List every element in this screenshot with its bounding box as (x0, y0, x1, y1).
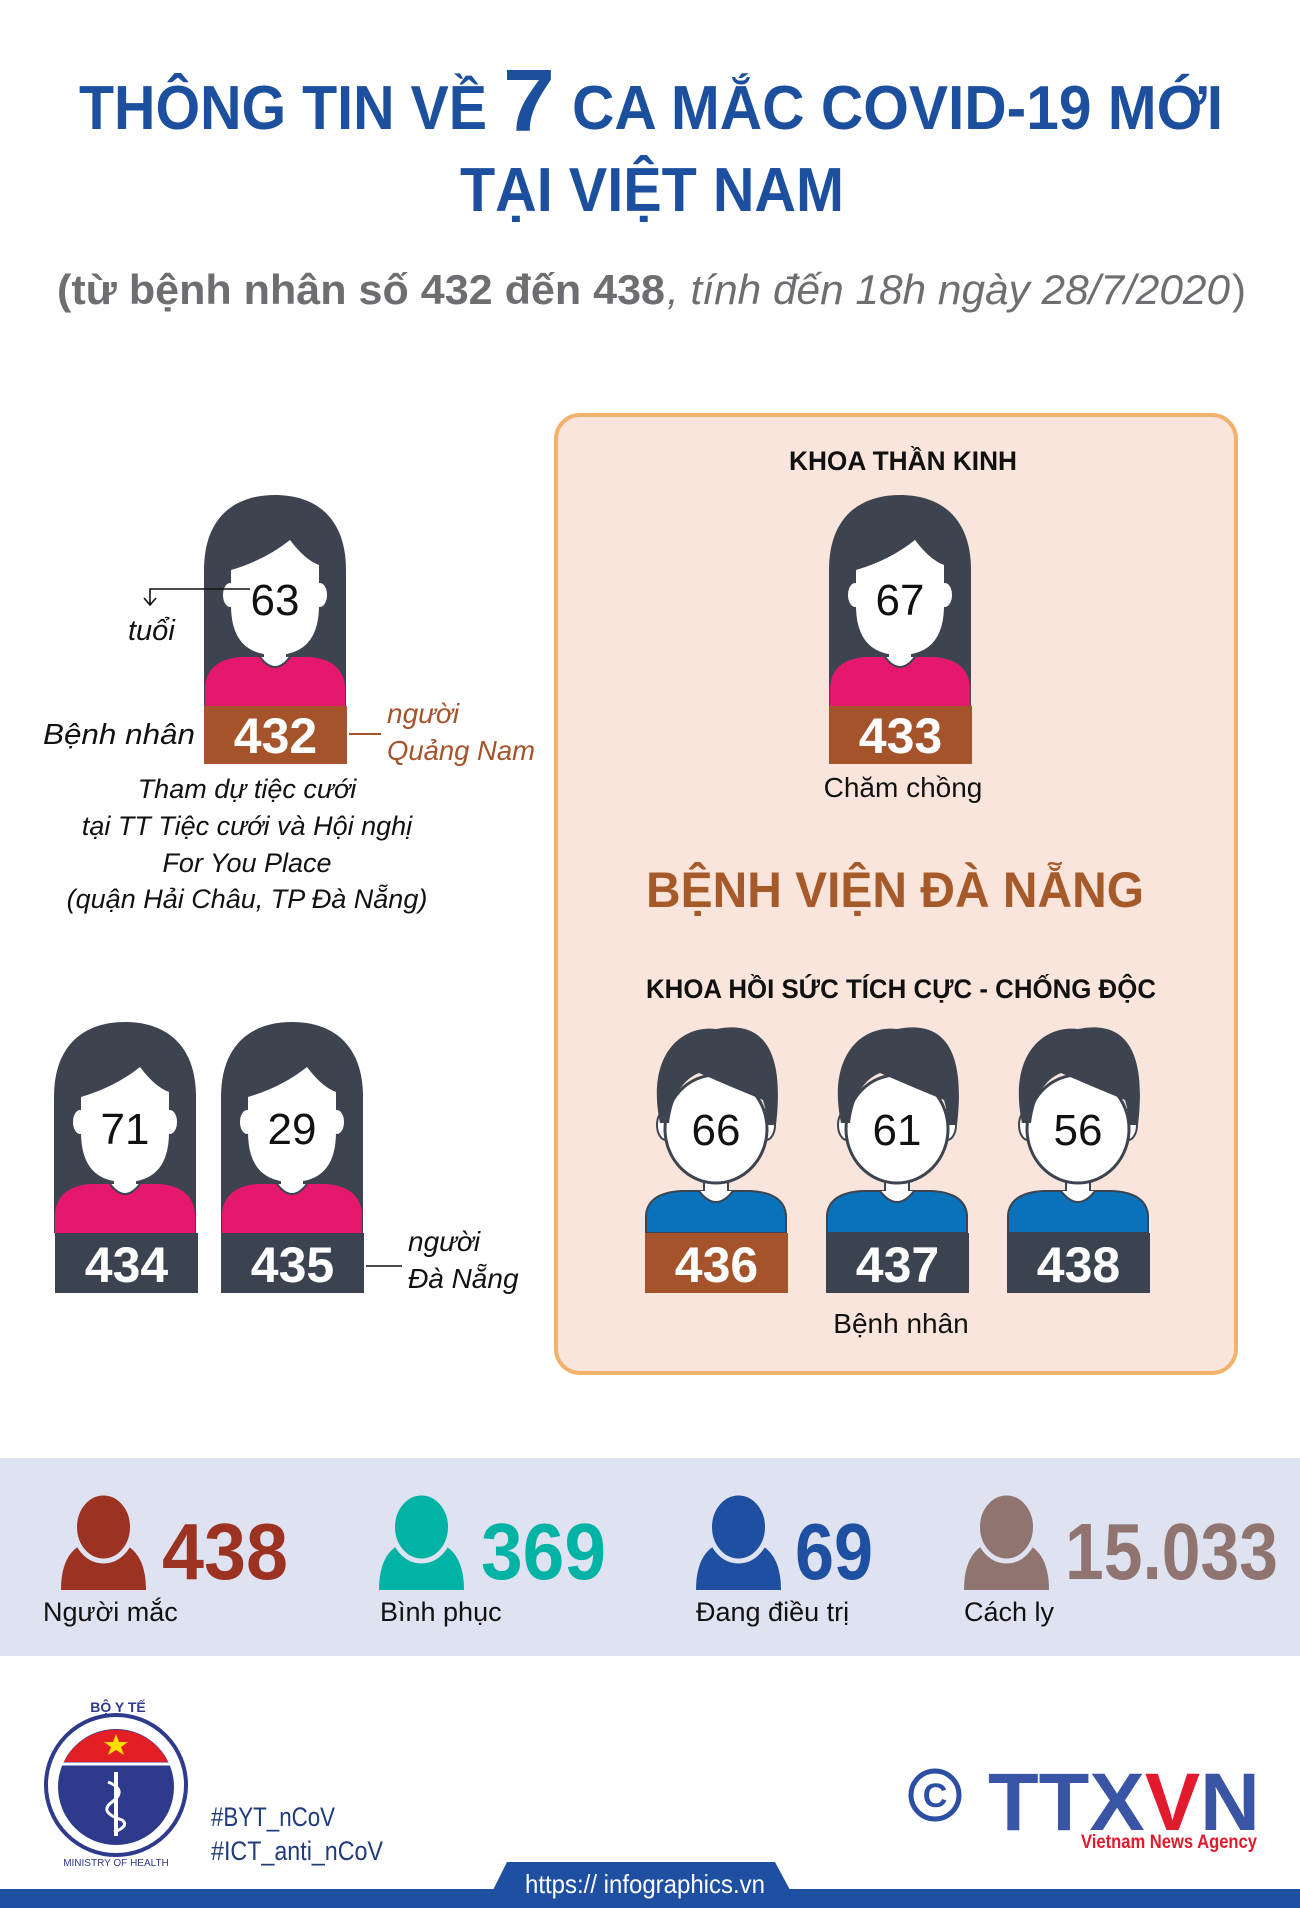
stat: Bình phục (379, 1493, 606, 1627)
stat: Bình phục: Bình phục (380, 1597, 502, 1627)
footer bar: https:// infographics.vn (525, 1869, 765, 1899)
stat: Đang điều trị: 69 (795, 1507, 873, 1596)
patient 433: Chăm chồng (824, 772, 982, 803)
patient 433: 433 (859, 708, 942, 764)
age 63: 63 (251, 576, 299, 625)
description (67, 774, 427, 914)
stat: Cách ly (964, 1493, 1278, 1627)
description: Tham dự tiệc cưới (138, 774, 357, 804)
footer bar (0, 1862, 1300, 1908)
stat: Người mắc (43, 1493, 288, 1627)
logo: Ministry of Health (46, 1698, 186, 1869)
origin Đà Nẵng: người (408, 1226, 481, 1257)
title: 7 (503, 51, 555, 150)
origin Đà Nẵng (366, 1226, 519, 1294)
arrow: tuổi (144, 589, 250, 605)
stat: Đang điều trị: Đang điều trị (696, 1597, 849, 1627)
subtitle (57, 266, 1246, 313)
hashtags (211, 1802, 383, 1866)
logo: Ministry of Health: MINISTRY OF HEALTH (63, 1858, 169, 1869)
logo: TTXVN: C (923, 1777, 947, 1815)
label tuổi: tuổi (128, 615, 176, 647)
patients 434 435: 435 (251, 1237, 334, 1293)
patients 434 435 (54, 1022, 519, 1294)
stat: Bình phục: 369 (481, 1507, 606, 1596)
patient 433: 67 (876, 576, 924, 625)
patients 434 435: 29 (268, 1105, 316, 1154)
patients 434 435: 71 (101, 1105, 149, 1154)
patients 436 437 438: 66 (692, 1106, 740, 1155)
title: THÔNG TIN VỀ (79, 74, 487, 143)
origin Quảng Nam: Quảng Nam (387, 735, 535, 766)
patients 434 435: 434 (85, 1237, 168, 1293)
patients 436 437 438: 436 (675, 1237, 758, 1293)
description: tại TT Tiệc cưới và Hội nghị (82, 811, 413, 841)
logo: TTXVN: TTXVN (988, 1757, 1260, 1848)
stat: Người mắc: 438 (162, 1507, 288, 1596)
patient 432 (43, 495, 535, 914)
logo: TTXVN: Vietnam News Agency (1081, 1832, 1257, 1853)
description: (quận Hải Châu, TP Đà Nẵng) (67, 884, 427, 914)
box 432 (204, 706, 347, 764)
label Bệnh nhân: Bệnh nhân (43, 719, 195, 751)
description: For You Place (162, 848, 332, 878)
heading KHOA HỒI SỨC: KHOA HỒI SỨC TÍCH CỰC - CHỐNG ĐỘC (646, 972, 1156, 1004)
title: CA MẮC COVID-19 MỚI (572, 74, 1223, 143)
origin Quảng Nam (349, 698, 535, 766)
patients 436 437 438: 438 (1037, 1237, 1120, 1293)
patients 436 437 438: 437 (856, 1237, 939, 1293)
patient 432: 432 (234, 708, 317, 764)
patients 436 437 438: 56 (1054, 1106, 1102, 1155)
subtitle: ) (1232, 266, 1246, 313)
heading KHOA THẦN KINH: KHOA THẦN KINH (789, 445, 1017, 476)
subtitle: (từ bệnh nhân số 432 đến 438 (57, 266, 665, 313)
patients 436 437 438: 61 (873, 1106, 921, 1155)
logo: Ministry of Health: BỘ Y TẾ (90, 1698, 146, 1715)
hospital name: BỆNH VIỆN ĐÀ NẴNG (646, 862, 1144, 918)
stat: Cách ly: Cách ly (964, 1597, 1055, 1627)
origin Quảng Nam: người (387, 698, 460, 729)
patients 436 437 438 (645, 1027, 1150, 1339)
hashtags: #BYT_nCoV (211, 1802, 335, 1832)
title (79, 51, 1223, 225)
stat: Đang điều trị (696, 1493, 873, 1627)
patient 433 (824, 495, 982, 803)
hashtags: #ICT_anti_nCoV (211, 1836, 383, 1866)
title: TẠI VIỆT NAM (460, 156, 844, 225)
stats band (0, 1458, 1300, 1656)
stat: Người mắc: Người mắc (43, 1596, 178, 1627)
subtitle: , tính đến 18h ngày 28/7/2020 (667, 266, 1231, 313)
patients 436 437 438: Bệnh nhân (833, 1308, 969, 1339)
panel: Bệnh viện Đà Nẵng (556, 415, 1236, 1373)
origin Đà Nẵng: Đà Nẵng (408, 1263, 519, 1294)
